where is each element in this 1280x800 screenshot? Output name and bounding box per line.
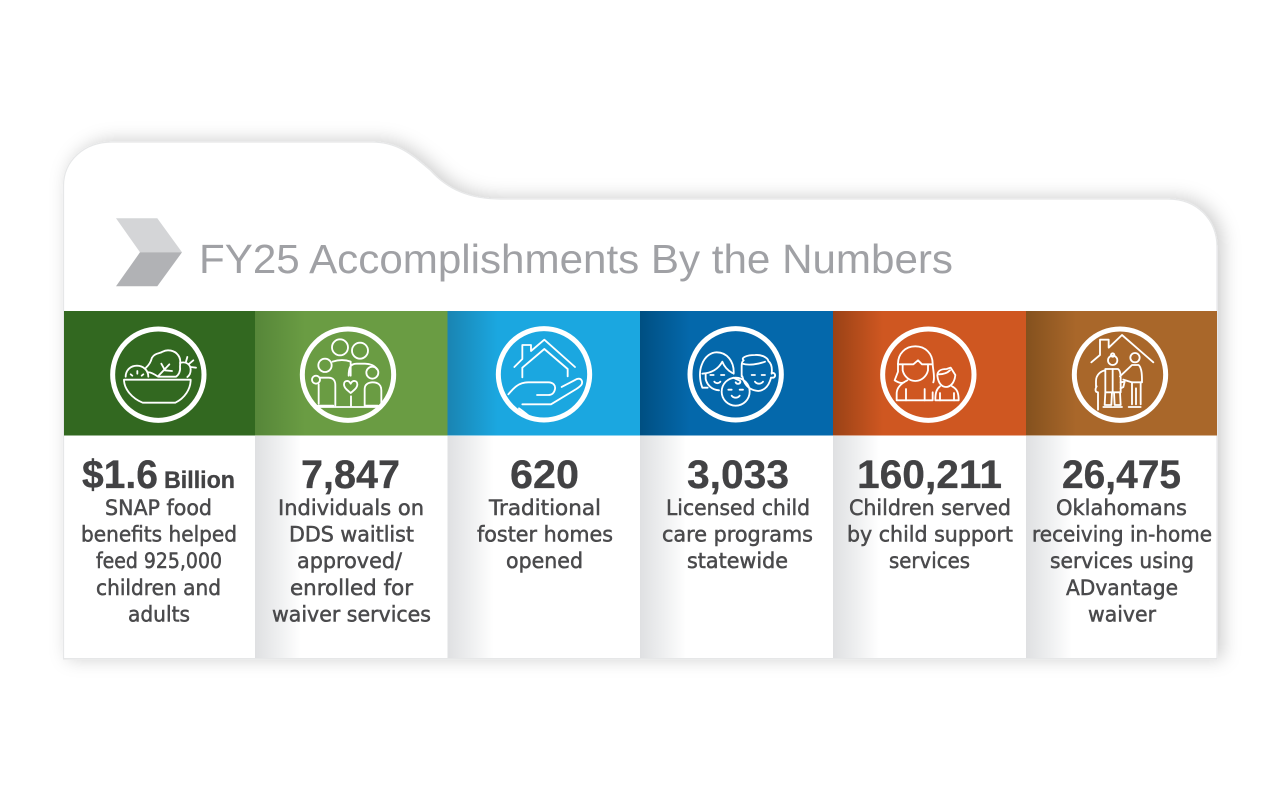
stat: DDS waitlist: enrolled for: [290, 576, 413, 600]
stat: child support: services: [889, 549, 970, 573]
stat: foster homes: Traditional: [488, 496, 601, 520]
stat: ADvantage waiver: waiver: [1088, 602, 1156, 626]
stat: licensed child care: 3,033: [687, 453, 789, 497]
icon: chevron arrow: [116, 218, 182, 286]
stat: DDS waitlist: DDS waitlist: [289, 522, 414, 546]
stat: SNAP food benefits: feed 925,000: [96, 549, 222, 573]
stat: foster homes: opened: [506, 549, 583, 573]
stat: SNAP food benefits: children and: [96, 576, 221, 600]
stat: foster homes: foster homes: [477, 522, 613, 546]
panel: colored band: [64, 311, 1217, 436]
stat: SNAP food benefits: $1.6: [82, 453, 158, 497]
icon: salad bowl: [113, 329, 204, 420]
panel: folder card: [64, 142, 1217, 659]
stat: SNAP food benefits: Billion: [164, 467, 235, 494]
stat: licensed child care: care programs: [662, 522, 813, 546]
stat: ADvantage waiver: [1032, 453, 1212, 626]
stat: DDS waitlist: Individuals on: [278, 496, 424, 520]
icon: family: [302, 329, 394, 420]
stat: SNAP food benefits: [81, 453, 237, 626]
panel: body column shading: [255, 436, 1072, 658]
stat: DDS waitlist: waiver services: [272, 602, 431, 626]
panel: card bottom edge: [63, 658, 1218, 660]
icon: caregiver and elder at home: [1074, 329, 1166, 420]
stat: ADvantage waiver: services using: [1050, 549, 1194, 573]
stat: DDS waitlist: 7,847: [301, 453, 400, 497]
stat: child support: Children served: [849, 496, 1011, 520]
stat: licensed child care: [662, 453, 813, 573]
stat: ADvantage waiver: 26,475: [1062, 453, 1181, 497]
title: FY25 Accomplishments By the Numbers: [199, 236, 953, 282]
stat: DDS waitlist: [272, 453, 431, 626]
stat: child support: [847, 453, 1013, 573]
stat: child support: by child support: [847, 522, 1013, 546]
icon: three faces: [690, 329, 781, 420]
stat: licensed child care: statewide: [687, 549, 788, 573]
stat: ADvantage waiver: Oklahomans: [1056, 496, 1187, 520]
stat: SNAP food benefits: SNAP food: [105, 496, 212, 520]
icon: hand holding house: [498, 329, 590, 420]
stat: DDS waitlist: approved/: [297, 549, 403, 573]
stat: SNAP food benefits: benefits helped: [81, 522, 237, 546]
stat: ADvantage waiver: ADvantage: [1066, 576, 1178, 600]
stat: SNAP food benefits: adults: [128, 602, 190, 626]
stat: foster homes: [477, 453, 613, 573]
stat: foster homes: 620: [510, 453, 579, 497]
stat: ADvantage waiver: receiving in-home: [1032, 522, 1212, 546]
stat: child support: 160,211: [857, 453, 1002, 497]
stat: licensed child care: Licensed child: [666, 496, 810, 520]
icon: parent and child: [883, 329, 974, 420]
